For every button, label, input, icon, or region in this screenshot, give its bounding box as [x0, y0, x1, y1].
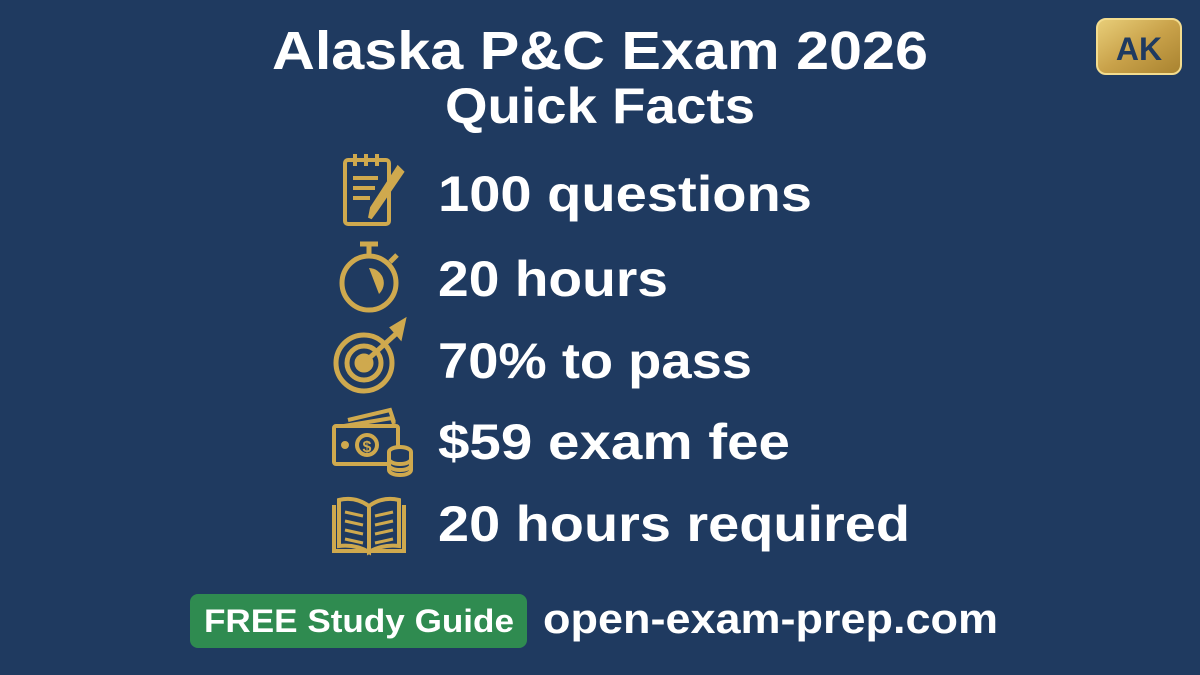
- fact: pass score: 70% to pass: [438, 333, 752, 389]
- icon: stopwatch: [342, 244, 397, 310]
- icon: open book: [334, 499, 404, 552]
- fact: exam fee: [334, 410, 790, 475]
- fact: hours: 20 hours: [438, 251, 668, 307]
- badge: AK: [1097, 19, 1181, 74]
- icon: target: [336, 322, 403, 391]
- fact: questions: [345, 154, 812, 224]
- badge: AK: AK: [1116, 31, 1162, 67]
- footer: study guide button: FREE Study Guide: [204, 603, 514, 639]
- title: Quick Facts: [445, 78, 755, 134]
- footer: study guide button: [190, 594, 527, 648]
- fact: pass score: [336, 322, 752, 391]
- title: Alaska P&C Exam 2026: [272, 21, 928, 81]
- fact: exam fee: $59 exam fee: [438, 414, 790, 470]
- fact: questions: 100 questions: [438, 166, 812, 222]
- title: [272, 21, 928, 134]
- footer: website url: open-exam-prep.com: [543, 595, 998, 642]
- fact: required hours: 20 hours required: [438, 496, 910, 552]
- icon: notepad with pencil: [345, 154, 402, 224]
- icon: money and coins: [334, 410, 411, 475]
- fact: hours: [342, 244, 668, 310]
- icon: money and coins: $: [363, 439, 372, 456]
